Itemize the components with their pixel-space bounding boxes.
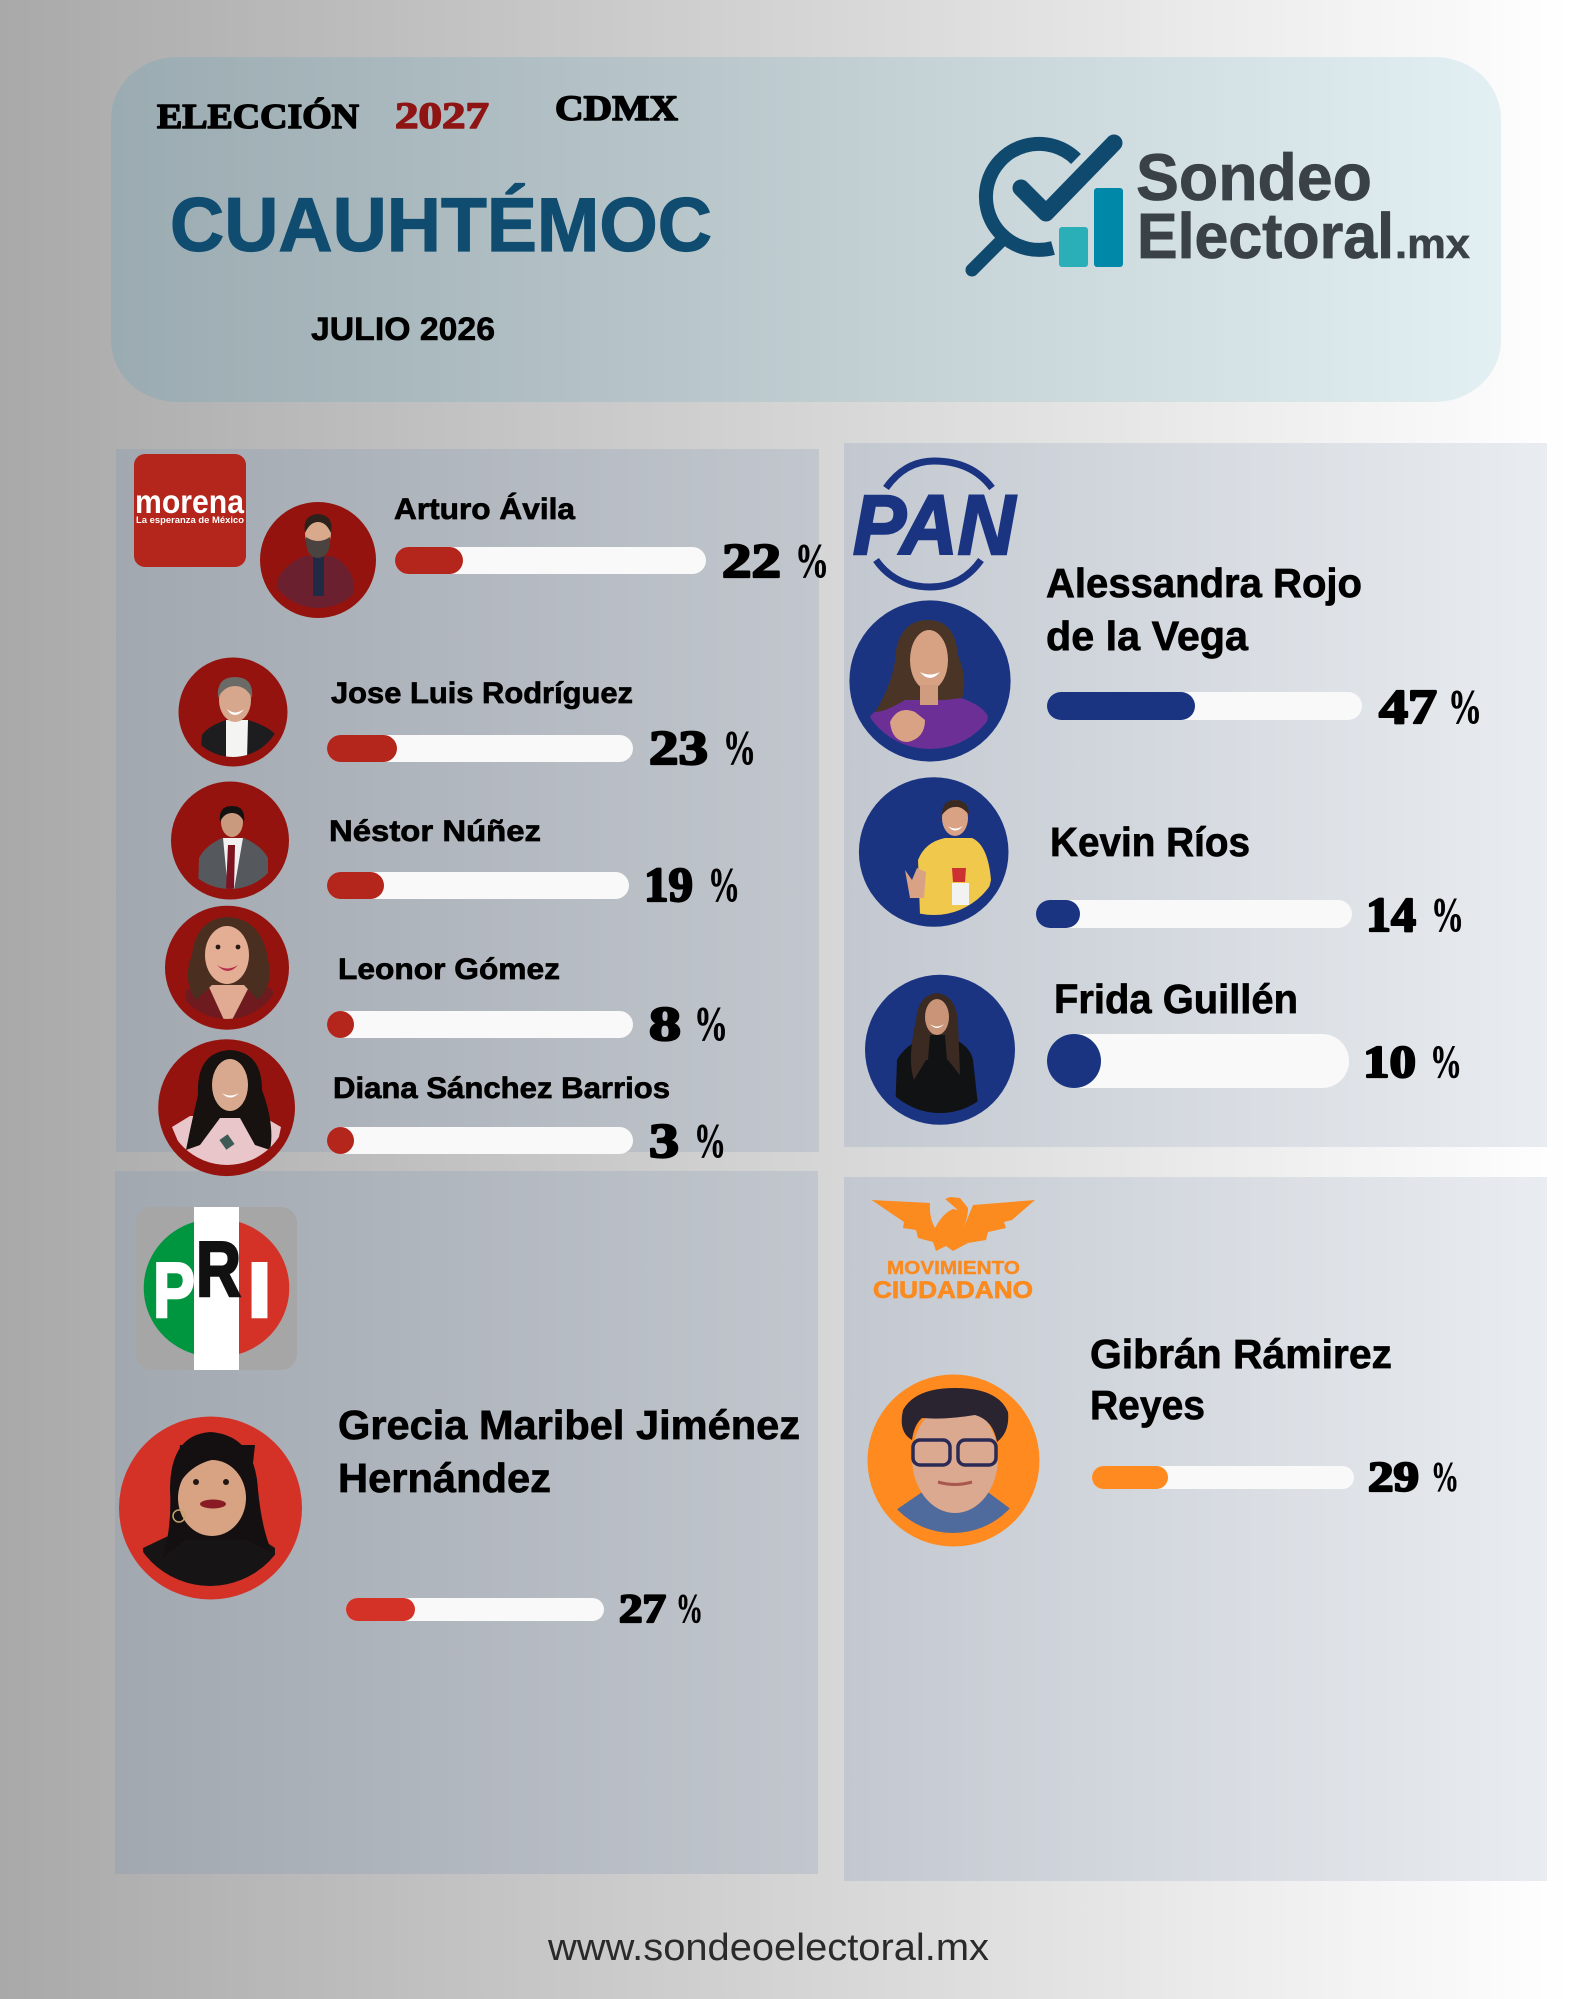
candidate: Frida Guillén xyxy=(865,975,1462,1125)
value: 10 xyxy=(1363,1036,1416,1087)
bar xyxy=(327,735,633,762)
value xyxy=(1366,887,1464,942)
portrait xyxy=(171,782,289,900)
value: % xyxy=(795,533,829,588)
panel background xyxy=(115,1171,818,1874)
bar xyxy=(327,872,629,899)
logo text: Ciudadano: CIUDADANO xyxy=(873,1277,1033,1304)
value: 47 xyxy=(1379,679,1437,734)
bar xyxy=(1092,1466,1354,1489)
value: % xyxy=(1448,679,1482,734)
value xyxy=(649,1113,726,1168)
value: 29 xyxy=(1368,1455,1419,1501)
value: % xyxy=(676,1585,703,1631)
value: % xyxy=(694,996,728,1051)
value xyxy=(1379,679,1482,734)
name: Alessandra Rojo xyxy=(1046,560,1362,606)
footer website: www.sondeoelectoral.mx xyxy=(547,1927,989,1969)
panel: Morena xyxy=(116,449,829,1176)
candidate: Alessandra Rojo de la Vega: de la Vega xyxy=(1046,613,1249,659)
logo: PAN: PAN xyxy=(853,478,1017,572)
candidate: Gibrán Rámirez Reyes xyxy=(868,1331,1459,1546)
bar xyxy=(395,547,706,574)
name: Arturo Ávila xyxy=(394,492,575,526)
value xyxy=(649,720,756,775)
name: Frida Guillén xyxy=(1054,976,1298,1022)
name: Néstor Núñez xyxy=(329,815,541,848)
logo: Morena: La esperanza de México xyxy=(136,515,244,526)
panel background xyxy=(116,449,819,1152)
candidate: Alessandra Rojo de la Vega xyxy=(849,560,1482,762)
portrait xyxy=(260,502,376,618)
portrait xyxy=(178,658,288,766)
title: CUAUHTÉMOC: CUAUHTÉMOC xyxy=(170,183,712,268)
value: 8 xyxy=(649,996,681,1051)
logo: PRI: I xyxy=(247,1246,272,1334)
value xyxy=(649,996,728,1051)
value xyxy=(644,857,740,912)
logo: Sondeo Electoral xyxy=(972,140,1471,272)
bar xyxy=(327,1011,633,1038)
bar xyxy=(346,1598,604,1621)
candidate: Gibrán Rámirez Reyes: Reyes xyxy=(1090,1382,1205,1428)
icon: magnifier with check and bars xyxy=(972,143,1123,270)
candidate: Jose Luis Rodríguez xyxy=(178,658,756,775)
value: % xyxy=(708,857,740,912)
heading: year 2027: 2027 xyxy=(395,96,489,137)
heading: ELECCIÓN: ELECCIÓN xyxy=(157,96,359,136)
candidate: Grecia Maribel Jiménez Hernández: Hernández xyxy=(338,1455,551,1501)
header background xyxy=(111,57,1501,402)
portrait xyxy=(158,1039,295,1176)
name: Leonor Gómez xyxy=(338,953,560,986)
logo: PRI: P xyxy=(153,1246,195,1334)
bar xyxy=(327,1127,633,1154)
name: Jose Luis Rodríguez xyxy=(331,677,633,710)
value: % xyxy=(694,1113,726,1168)
logo: PRI xyxy=(136,1207,297,1370)
portrait xyxy=(859,777,1008,927)
value: 14 xyxy=(1366,887,1416,942)
logo: PRI: R xyxy=(196,1225,241,1313)
portrait xyxy=(165,906,289,1030)
value: 3 xyxy=(649,1113,679,1168)
logo text: Movimiento: MOVIMIENTO xyxy=(887,1257,1020,1278)
logo text: .mx: .mx xyxy=(1395,220,1471,267)
value: % xyxy=(723,720,756,775)
value: % xyxy=(1431,887,1464,942)
value xyxy=(1368,1455,1459,1501)
value: 27 xyxy=(619,1586,666,1631)
panel background xyxy=(844,443,1547,1147)
candidate: Diana Sánchez Barrios xyxy=(158,1039,726,1176)
panel background xyxy=(844,1177,1547,1881)
value: 22 xyxy=(722,533,781,588)
name: Kevin Ríos xyxy=(1050,819,1250,865)
panel: Movimiento Ciudadano xyxy=(844,1177,1547,1881)
panel: PAN xyxy=(844,443,1547,1147)
value: 19 xyxy=(644,857,693,912)
logo: Morena: morena xyxy=(135,483,245,520)
panel: PRI xyxy=(115,1171,818,1874)
logo text: Sondeo: Sondeo xyxy=(1136,140,1372,214)
value xyxy=(619,1585,703,1631)
bar xyxy=(1047,1034,1349,1088)
portrait xyxy=(865,975,1015,1125)
name: Grecia Maribel Jiménez xyxy=(338,1402,800,1448)
portrait xyxy=(849,600,1011,762)
portrait xyxy=(119,1416,302,1600)
candidate: Arturo Ávila xyxy=(260,492,829,618)
heading: CDMX: CDMX xyxy=(555,88,678,128)
bar xyxy=(1047,692,1362,720)
value: % xyxy=(1431,1455,1459,1501)
logo: Movimiento Ciudadano xyxy=(872,1197,1035,1304)
bar xyxy=(1036,900,1352,928)
icon: eagle xyxy=(872,1197,1035,1251)
value xyxy=(722,533,829,588)
candidate: Kevin Ríos xyxy=(859,777,1464,942)
logo text: Electoral: Electoral xyxy=(1137,200,1394,272)
date: JULIO 2026 xyxy=(311,311,495,347)
portrait xyxy=(868,1374,1040,1546)
value: % xyxy=(1430,1036,1462,1088)
value xyxy=(1363,1036,1462,1088)
candidate: Néstor Núñez xyxy=(171,782,740,912)
value: 23 xyxy=(649,720,708,775)
candidate: Leonor Gómez xyxy=(165,906,728,1051)
name: Diana Sánchez Barrios xyxy=(333,1072,670,1105)
header panel xyxy=(111,57,1501,402)
logo: Morena xyxy=(134,454,246,567)
name: Gibrán Rámirez xyxy=(1090,1331,1392,1377)
candidate: Grecia Maribel Jiménez Hernández xyxy=(119,1402,800,1631)
